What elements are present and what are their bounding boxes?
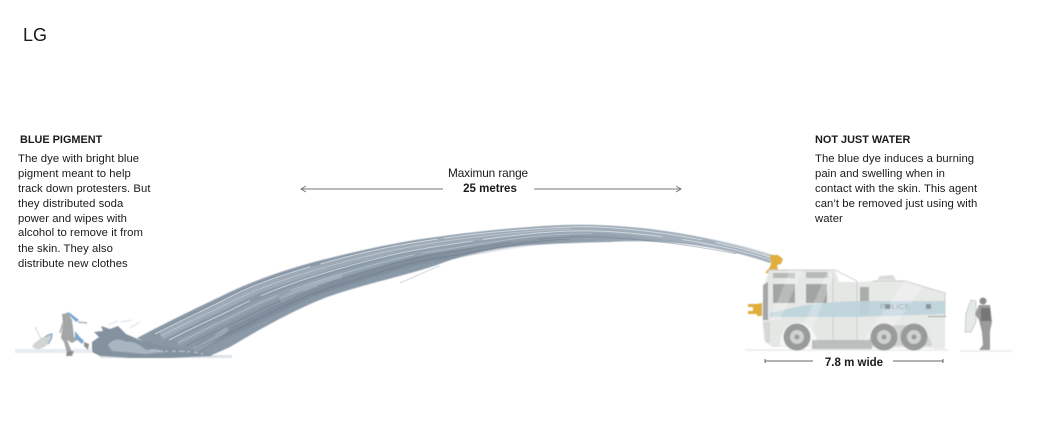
- range label: maximum range 25 metres: [448, 166, 529, 195]
- wheel: rear 2: [900, 324, 928, 350]
- dimension: 7.8 m wide: 7.8 m wide: [825, 357, 883, 369]
- wheel: front: [784, 324, 810, 350]
- text block: not just water: [814, 134, 978, 225]
- undercarriage: [812, 340, 872, 349]
- body: blue pigment: track down protesters. But: [18, 183, 151, 195]
- body: not just water: The blue dye induces a burning: [815, 153, 974, 165]
- shield: [965, 300, 976, 332]
- arrow: range left: [301, 186, 443, 192]
- rear body: [857, 281, 945, 348]
- arrow: range right: [534, 186, 681, 192]
- body: blue pigment: alcohol to remove it from: [18, 227, 143, 239]
- body: not just water: [814, 153, 978, 225]
- rear mudguard: [930, 317, 945, 349]
- roof lights: [877, 275, 896, 280]
- body: blue pigment: the skin. They also: [18, 243, 113, 255]
- range label: maximum range 25 metres: 25 metres: [463, 183, 517, 195]
- body: blue pigment: they distributed soda: [18, 198, 124, 210]
- water splash: [92, 320, 232, 358]
- wheel arches: [780, 323, 818, 346]
- logo: LG: LG: [23, 25, 47, 45]
- blue band: [770, 301, 945, 317]
- body: blue pigment: pigment meant to help: [18, 168, 131, 180]
- front bumper nozzle: [748, 303, 762, 316]
- cab: [762, 270, 859, 347]
- wheel: rear 1: [870, 324, 898, 350]
- figure: protester with umbrella: [15, 312, 92, 356]
- heading: blue pigment: BLUE PIGMENT: [20, 134, 103, 146]
- cab windows: [773, 284, 827, 303]
- range label: maximum range 25 metres: Maximun range: [448, 166, 529, 180]
- body: not just water: water: [814, 213, 843, 225]
- lower cab shading: [763, 322, 770, 343]
- body: blue pigment: distribute new clothes: [18, 258, 128, 270]
- heading: not just water: NOT JUST WATER: [815, 134, 911, 146]
- text block: blue pigment: [18, 134, 151, 270]
- ground shadow: [15, 349, 92, 353]
- nozzle: [765, 255, 783, 274]
- protester body: [61, 313, 79, 353]
- body: blue pigment: The dye with bright blue: [18, 153, 139, 165]
- officer: [975, 305, 992, 350]
- body: blue pigment: power and wipes with: [18, 213, 127, 225]
- dimension: 7.8 m wide: [765, 357, 943, 369]
- ground shadow: [745, 349, 948, 351]
- water jet: [137, 225, 772, 357]
- body: not just water: contact with the skin. This agent: [815, 183, 978, 195]
- figure: riot police: [960, 298, 1012, 352]
- umbrella: [32, 334, 52, 349]
- diagonal reflections: [770, 270, 923, 345]
- water cannon truck: [745, 255, 948, 351]
- ground shadow: [960, 350, 1012, 352]
- body: blue pigment: [18, 153, 151, 270]
- police text: POLICE: [880, 302, 910, 311]
- body: not just water: can’t be removed just using with: [815, 198, 977, 210]
- body: not just water: pain and swelling when in: [815, 168, 945, 180]
